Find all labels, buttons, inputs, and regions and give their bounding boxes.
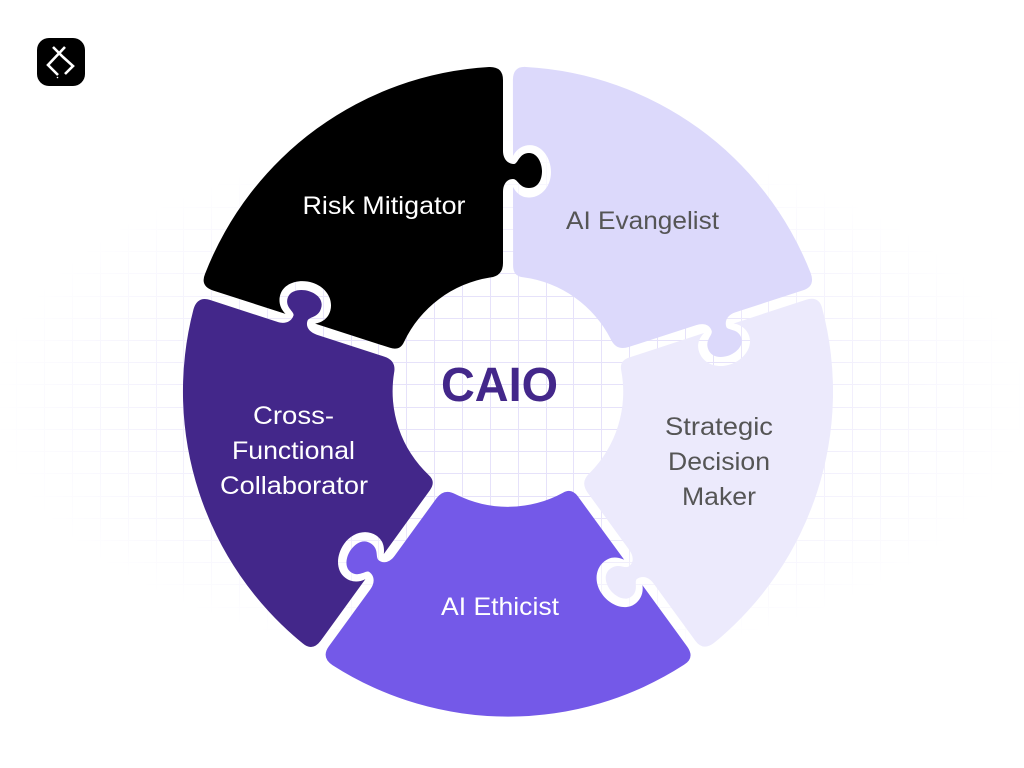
puzzle piece: Risk Mitigator: Risk Mitigator (302, 192, 466, 220)
puzzle piece: Cross-Functional Collaborator: Functional (232, 437, 355, 465)
center title: CAIO (441, 359, 558, 412)
puzzle piece: Cross-Functional Collaborator: Collaborator (220, 472, 368, 500)
puzzle piece: Strategic Decision Maker: Strategic (665, 413, 773, 441)
puzzle piece: AI Ethicist (326, 491, 691, 717)
puzzle piece: AI Evangelist: AI Evangelist (566, 207, 719, 235)
puzzle piece: Cross-Functional Collaborator: Cross- (253, 402, 334, 430)
puzzle piece: Strategic Decision Maker: Maker (682, 483, 756, 511)
puzzle piece: AI Ethicist: AI Ethicist (441, 593, 559, 621)
puzzle piece: Risk Mitigator (204, 67, 542, 349)
puzzle piece: Cross-Functional Collaborator (183, 290, 433, 647)
puzzle piece: Strategic Decision Maker (584, 299, 833, 647)
puzzle piece: Strategic Decision Maker: Decision (668, 448, 770, 476)
logo (37, 38, 85, 86)
puzzle piece: AI Evangelist (513, 67, 812, 357)
